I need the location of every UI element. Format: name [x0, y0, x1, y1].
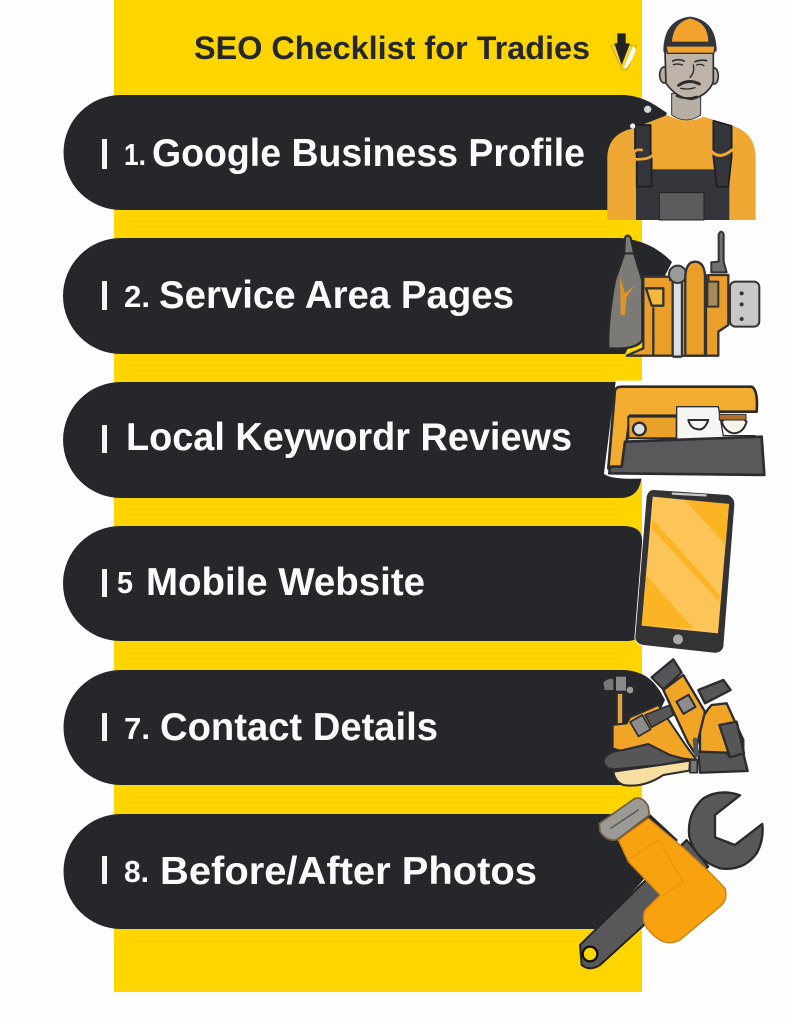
cup	[688, 420, 708, 429]
worker overalls	[636, 169, 729, 220]
orange pipe	[618, 818, 726, 943]
row 6: Before/After Photos	[63, 814, 678, 929]
worker neck	[672, 93, 701, 120]
wrench shaft	[580, 840, 708, 968]
row 5: Contact Details	[63, 670, 665, 785]
screwdriver	[673, 280, 682, 357]
icon: tool bag	[603, 659, 748, 786]
belt divider lines	[653, 275, 706, 356]
row 2: Service Area Pages: 2.	[124, 279, 150, 314]
row 6: Before/After Photos: Before/After Photos	[160, 850, 537, 893]
row 5: Contact Details: Contact Details	[160, 706, 438, 749]
machine white outline	[605, 382, 767, 478]
machine white head	[677, 407, 755, 440]
machine panel	[628, 417, 677, 438]
worker buckles	[633, 150, 654, 159]
antenna tool	[711, 232, 727, 272]
row 3: Local Keywordr Reviews: Local Keywordr Reviews	[126, 416, 572, 459]
row 2: Service Area Pages: Service Area Pages	[159, 274, 514, 317]
bag centre strap	[663, 675, 705, 753]
wrench eye	[583, 947, 597, 961]
grey leg panel	[719, 722, 744, 757]
icon: wrench and pipe	[580, 792, 763, 968]
row 4: Mobile Website	[63, 526, 642, 641]
title: SEO Checklist for Tradies	[194, 30, 590, 66]
tall handle	[685, 262, 705, 356]
icon: tradie worker	[607, 17, 756, 220]
row 2: Service Area Pages	[63, 238, 672, 354]
row 6: Before/After Photos: 8.	[124, 854, 149, 889]
wrench head	[689, 792, 763, 869]
worker facial features	[673, 60, 707, 98]
row 5: Contact Details: 7.	[124, 711, 150, 746]
tape measure	[730, 282, 759, 327]
worker pocket	[659, 193, 704, 220]
worker shirt	[607, 115, 756, 220]
yellow background column	[114, 0, 642, 992]
worker helmet	[663, 17, 717, 52]
bag strap grey	[652, 659, 682, 689]
row 1: Google Business Profile: Google Business Profile	[152, 132, 585, 175]
phone speaker	[672, 492, 707, 497]
row 1: Google Business Profile: 1.	[124, 137, 146, 172]
bag right pouch	[700, 703, 743, 757]
bag bottom roll	[613, 761, 690, 786]
name badge dots	[644, 106, 651, 113]
belt pouch left	[646, 288, 663, 306]
machine top body	[608, 387, 757, 468]
hammer tool	[617, 693, 623, 748]
row 4: Mobile Website: 5	[117, 565, 133, 600]
icon: smartphone	[635, 490, 734, 653]
row 4: Mobile Website: Mobile Website	[146, 561, 425, 604]
spray bottle	[608, 253, 642, 349]
worker straps	[635, 125, 652, 187]
belt pouch right	[707, 282, 718, 307]
row 1: Google Business Profile	[64, 95, 667, 210]
worker ears	[660, 67, 668, 83]
icon: tool belt	[608, 232, 759, 357]
icon: machine	[605, 382, 767, 478]
worker face	[665, 52, 713, 99]
phone button	[673, 634, 683, 644]
icon: arrow badge	[611, 33, 636, 70]
screen highlights	[685, 500, 729, 545]
phone screen	[642, 497, 729, 633]
row 3: Local Keywordr Reviews	[63, 382, 642, 498]
pipe cap	[599, 798, 649, 840]
machine base	[609, 437, 764, 475]
phone body	[635, 490, 734, 653]
belt body	[627, 275, 728, 356]
bag left pouch	[613, 705, 697, 760]
